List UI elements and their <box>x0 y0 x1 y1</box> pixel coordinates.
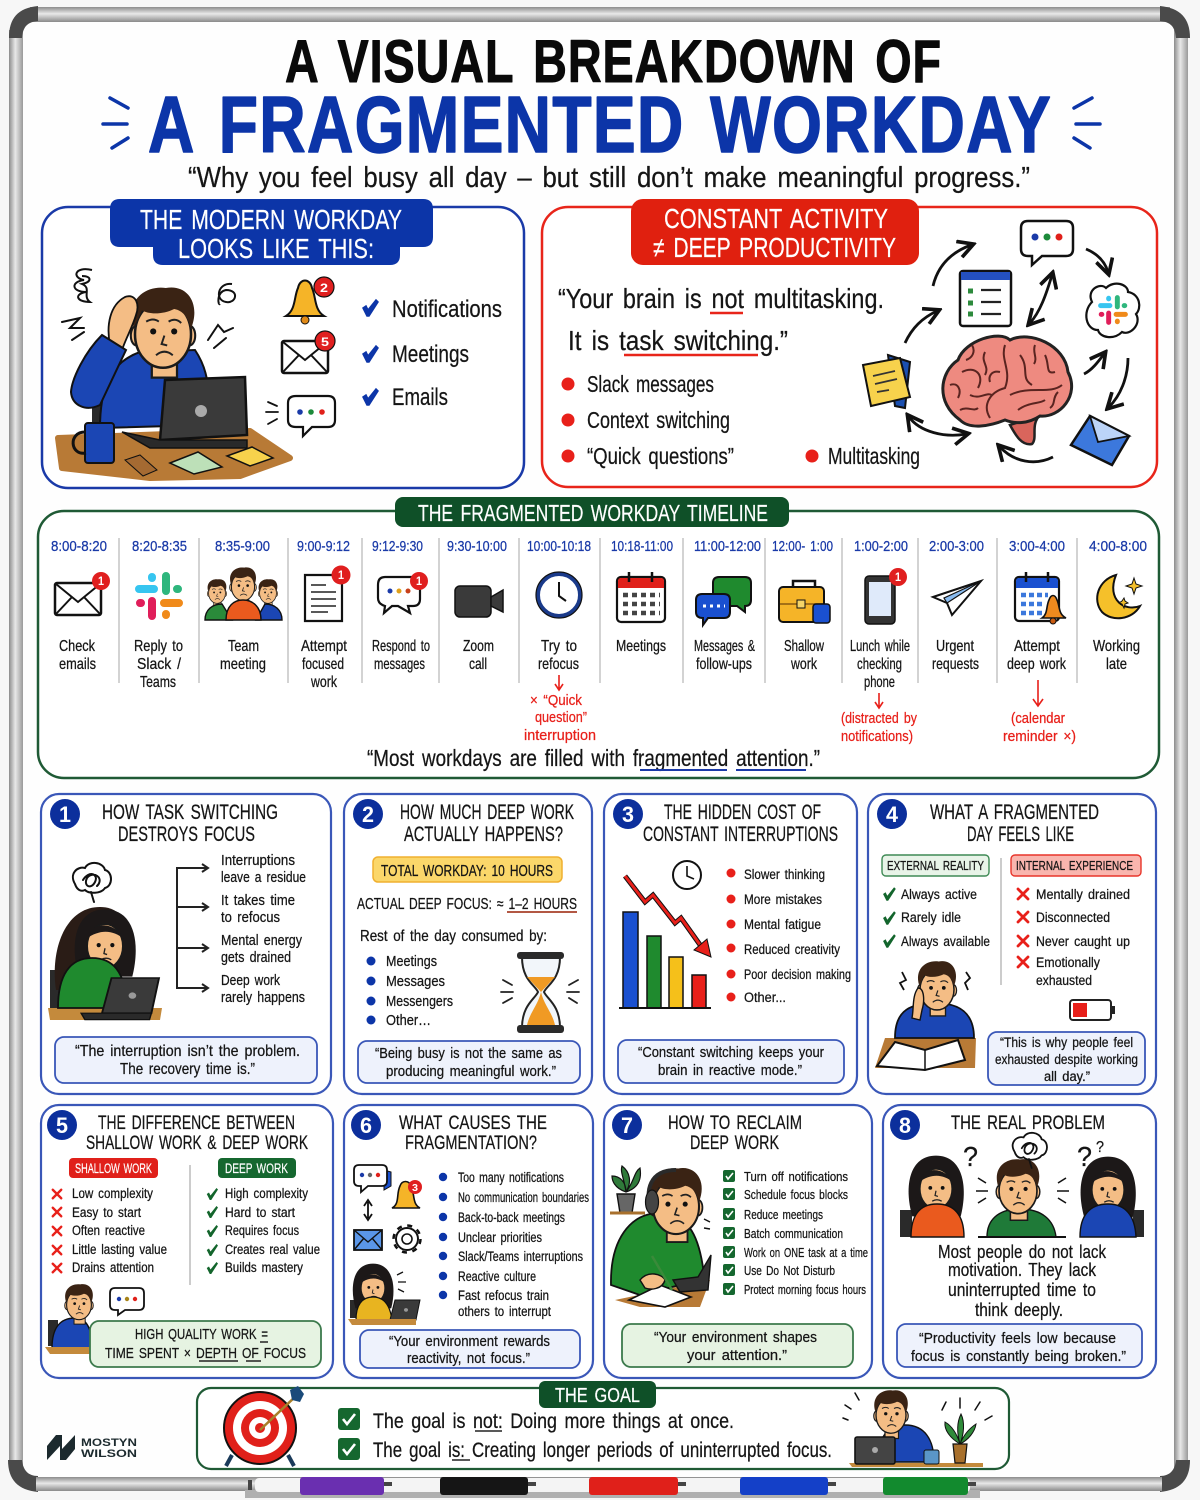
tag: shallow work: SHALLOW WORK <box>75 1161 152 1176</box>
illustration: three confused people: ? <box>963 1141 978 1172</box>
shallow list: Drains attention <box>72 1260 154 1275</box>
icon: messages <box>696 577 751 625</box>
activity labels: Working <box>1093 638 1140 655</box>
icon: clock <box>673 861 701 889</box>
external list: Rarely idle <box>901 910 961 925</box>
tag: internal experience: INTERNAL EXPERIENCE <box>1016 858 1133 873</box>
activity labels: Shallow <box>784 638 824 655</box>
activity labels: work <box>310 674 338 691</box>
causes list: No communication boundaries <box>458 1190 589 1205</box>
illustration: tired man with book <box>875 961 976 1070</box>
formula box <box>90 1321 321 1367</box>
tag: external reality <box>882 855 989 876</box>
chart: falling bars <box>619 876 711 1008</box>
activity labels: messages <box>374 656 425 673</box>
icon: camera <box>455 586 503 617</box>
activity labels: Respond to <box>372 638 430 655</box>
icon: slack <box>139 576 179 616</box>
heading: DESTROYS FOCUS <box>118 823 255 846</box>
activity labels: checking <box>857 656 902 673</box>
number badge: 8 <box>899 1113 911 1138</box>
time labels <box>51 539 1147 555</box>
number badge: 5 <box>56 1113 68 1138</box>
illustration: woman at laptop <box>48 863 162 1020</box>
quote box <box>622 1324 853 1367</box>
heading <box>399 1113 547 1154</box>
illustration: brain with surrounding tools <box>863 221 1139 465</box>
quote box: “Productivity feels low because <box>919 1330 1116 1347</box>
bullet list: Context switching <box>587 407 730 433</box>
external list: Always available <box>901 934 990 949</box>
quote box <box>618 1040 844 1083</box>
text block: think deeply. <box>975 1300 1063 1320</box>
heading: constant activity <box>631 199 919 265</box>
text block: motivation. They lack <box>948 1260 1097 1280</box>
icon: envelope <box>1071 416 1129 465</box>
deep list <box>207 1186 320 1275</box>
quote box: “The interruption isn’t the problem. <box>75 1043 300 1060</box>
card 5: shallow vs deep <box>41 1105 333 1378</box>
icon: envelope with badge <box>282 331 335 373</box>
internal list: Mentally drained <box>1036 887 1130 902</box>
time labels: 8:00-8:20 <box>51 539 107 555</box>
quote box: “Being busy is not the same as <box>375 1045 562 1062</box>
activity labels: phone <box>864 674 895 691</box>
callouts: red interruptions: notifications) <box>841 728 913 745</box>
quote: task switching <box>558 283 884 356</box>
goal statements: The goal is not: Doing more things at once. <box>373 1410 734 1433</box>
goal statements: The goal is: Creating longer periods of uninterrupted focus. <box>373 1439 832 1462</box>
illustration: three confused people: ? <box>1096 1139 1104 1156</box>
title <box>103 28 1100 169</box>
activity labels: follow-ups <box>696 656 752 673</box>
bullet list: “Quick questions” <box>587 443 734 469</box>
heading: THE HIDDEN COST OF <box>664 801 821 824</box>
illustration: woman at laptop <box>348 1264 420 1325</box>
deep list: Builds mastery <box>225 1260 303 1275</box>
icon: clock <box>536 572 582 618</box>
checklist: Work on ONE task at a time <box>744 1245 868 1260</box>
heading: modern workday: THE MODERN WORKDAY <box>140 204 402 235</box>
activity labels: requests <box>932 656 979 673</box>
bullet list <box>726 867 851 1005</box>
quote box: “Your environment rewards <box>389 1333 550 1350</box>
icon: bell: 3 <box>412 1183 418 1194</box>
icon: document: 1 <box>338 568 344 582</box>
panel: timeline <box>38 497 1159 778</box>
shallow list <box>53 1186 167 1275</box>
internal list: Never caught up <box>1036 934 1130 949</box>
checklist: Protect morning focus hours <box>744 1282 866 1297</box>
marker tray with markers <box>245 1477 980 1498</box>
icon: chat <box>354 1165 391 1192</box>
deep list: Hard to start <box>225 1205 295 1220</box>
icon: chat <box>378 572 428 613</box>
icon: calendar with bell <box>1015 572 1066 624</box>
illustration: man at laptop <box>45 1284 93 1354</box>
consequences list: leave a residue <box>221 869 306 886</box>
heading <box>643 801 838 846</box>
checklist <box>363 296 502 411</box>
number badge <box>50 799 80 829</box>
activity labels: refocus <box>538 656 579 673</box>
heading <box>930 801 1099 846</box>
heading: DEEP WORK <box>690 1133 779 1154</box>
illustration: man with laptop and plant <box>843 1390 992 1467</box>
card 3: interruptions cost <box>604 794 857 1094</box>
activity labels: Reply to <box>134 638 183 655</box>
consequences list: It takes time <box>221 892 295 909</box>
quote: task switching: “Your brain is not multitasking. <box>558 283 884 314</box>
callouts: red interruptions: × “Quick <box>530 692 582 709</box>
consequences list: gets drained <box>221 949 291 966</box>
heading: THE REAL PROBLEM <box>951 1113 1105 1134</box>
quote box: reactivity, not focus.” <box>407 1350 530 1367</box>
checklist: Use Do Not Disturb <box>744 1263 835 1278</box>
heading: DAY FEELS LIKE <box>967 823 1074 846</box>
bullet list: Reduced creativity <box>744 942 840 957</box>
time labels: 1:00-2:00 <box>854 539 908 555</box>
deep list: Requires focus <box>225 1223 299 1238</box>
internal list: Emotionally <box>1036 955 1100 970</box>
consequences list: rarely happens <box>221 989 305 1006</box>
activity labels: deep work <box>1007 656 1067 673</box>
icon: chat bubble <box>1021 221 1073 265</box>
activity labels: Messages & <box>694 638 755 655</box>
heading: ACTUALLY HAPPENS? <box>404 823 563 846</box>
icon: briefcase <box>779 581 830 623</box>
heading: WHAT A FRAGMENTED <box>930 801 1099 824</box>
quote box: “Your environment shapes <box>654 1329 817 1346</box>
causes list: Fast refocus train <box>458 1288 549 1303</box>
title: A VISUAL BREAKDOWN OF <box>285 28 942 95</box>
callouts: red interruptions <box>524 675 1076 745</box>
callouts: red interruptions: question” <box>535 709 587 726</box>
consequences list: to refocus <box>221 909 280 926</box>
bullet list: Other… <box>386 1012 431 1029</box>
icon: slack cloud <box>1086 284 1139 337</box>
activity labels: Slack / <box>137 656 181 673</box>
callouts: red interruptions: reminder ×) <box>1003 728 1076 745</box>
icon: chat: 1 <box>416 574 422 588</box>
time labels: 2:00-3:00 <box>929 539 984 555</box>
quote box: “Constant switching keeps your <box>638 1044 824 1061</box>
bullet list: Other... <box>744 990 786 1005</box>
activity labels: Check <box>59 638 96 655</box>
illustration: three confused people <box>900 1133 1144 1237</box>
heading <box>668 1113 802 1154</box>
icon: phone: 1 <box>895 570 901 584</box>
internal list: exhausted <box>1036 973 1092 988</box>
bullet list: Messages <box>386 973 445 990</box>
formula box: TIME SPENT × DEPTH OF FOCUS <box>105 1345 306 1362</box>
activity labels: Team <box>228 638 259 655</box>
number badge: 4 <box>886 802 899 827</box>
card 1: task switching <box>41 794 331 1094</box>
tag: internal experience <box>1011 855 1141 876</box>
time labels: 9:12-9:30 <box>372 539 423 555</box>
icon: chat <box>110 1288 144 1315</box>
time labels: 3:00-4:00 <box>1009 539 1065 555</box>
panel: constant activity <box>542 199 1157 487</box>
subtitle: “Why you feel busy all day – but still don’t make meaningful progress.” <box>188 162 1030 194</box>
bullet list: Multitasking <box>828 443 920 469</box>
number badge <box>47 1110 77 1140</box>
bracket arrows <box>177 868 208 988</box>
heading <box>400 801 574 846</box>
checklist: Meetings <box>392 341 469 368</box>
total workday tag <box>373 857 562 882</box>
quote: fragmented attention: “Most workdays are filled with fragmented attention.” <box>367 745 820 771</box>
number badge <box>877 799 907 829</box>
tag: shallow work <box>69 1158 158 1178</box>
activity labels: Teams <box>140 674 176 691</box>
card 6: causes <box>344 1105 593 1378</box>
activity labels: Lunch while <box>850 638 910 655</box>
quote box: The recovery time is.” <box>120 1061 255 1078</box>
heading: FRAGMENTATION? <box>405 1133 537 1154</box>
icon: moon <box>1097 575 1142 618</box>
text block <box>938 1242 1107 1320</box>
heading: modern workday: LOOKS LIKE THIS: <box>178 233 374 264</box>
illustration: focused man with headphones <box>610 1166 711 1307</box>
rest of day label: Rest of the day consumed by: <box>360 928 547 945</box>
heading: CONSTANT INTERRUPTIONS <box>643 823 838 846</box>
illustration: three confused people: ? <box>1077 1141 1092 1172</box>
checklist: Batch communication <box>744 1226 843 1241</box>
panel: the goal <box>197 1381 1009 1469</box>
consequences list: Mental energy <box>221 932 302 949</box>
number badge <box>890 1110 920 1140</box>
quote box <box>988 1032 1145 1085</box>
time labels: 9:00-9:12 <box>297 539 350 555</box>
quote box: producing meaningful work.” <box>386 1063 556 1080</box>
activity labels: Urgent <box>936 638 974 655</box>
checklist: Schedule focus blocks <box>744 1187 848 1202</box>
heading: HOW TO RECLAIM <box>668 1113 802 1134</box>
number badge: 6 <box>360 1113 372 1138</box>
heading: THE DIFFERENCE BETWEEN <box>98 1113 295 1134</box>
internal list: Disconnected <box>1036 910 1110 925</box>
icon: phone <box>865 568 907 624</box>
icon: hourglass <box>501 952 579 1033</box>
heading: timeline: THE FRAGMENTED WORKDAY TIMELINE <box>418 500 768 526</box>
shallow list: Little lasting value <box>72 1242 167 1257</box>
consequences list: Deep work <box>221 972 280 989</box>
icon: sticky note <box>863 355 910 408</box>
heading: constant activity: CONSTANT ACTIVITY <box>664 203 888 234</box>
panel: modern workday <box>42 199 524 488</box>
logo: Mostyn Wilson <box>47 1435 137 1460</box>
icon: email <box>55 572 110 615</box>
formula box: HIGH QUALITY WORK = <box>135 1326 268 1343</box>
icon: target <box>224 1386 304 1466</box>
activity labels: Try to <box>541 638 577 655</box>
number badge <box>612 1110 642 1140</box>
bullet list <box>562 371 920 469</box>
shallow list: Often reactive <box>72 1223 145 1238</box>
illustration: stressed man at laptop <box>58 269 290 478</box>
bullet list <box>366 953 453 1029</box>
icon: paper plane <box>933 581 981 615</box>
heading: HOW TASK SWITCHING <box>102 801 278 824</box>
bullet list: Mental fatigue <box>744 917 821 932</box>
time labels: 10:18-11:00 <box>611 539 673 555</box>
quote box: brain in reactive mode.” <box>658 1062 802 1079</box>
bullet list: Slower thinking <box>744 867 825 882</box>
shallow list: Easy to start <box>72 1205 141 1220</box>
time labels: 8:20-8:35 <box>132 539 187 555</box>
icon: bell <box>392 1180 422 1208</box>
activity labels: late <box>1106 656 1127 673</box>
external list <box>883 887 990 949</box>
activity labels: work <box>790 656 818 673</box>
deep list: Creates real value <box>225 1242 320 1257</box>
arrow heads <box>202 864 208 992</box>
heading: the goal <box>539 1381 656 1408</box>
heading: SHALLOW WORK & DEEP WORK <box>86 1133 308 1154</box>
callouts: red interruptions: interruption <box>524 727 596 744</box>
number badge <box>353 799 383 829</box>
icon: gear <box>394 1226 420 1252</box>
quote box <box>358 1041 580 1083</box>
number badge: 2 <box>362 802 374 827</box>
causes list: Unclear priorities <box>458 1230 542 1245</box>
goal statements <box>338 1408 832 1462</box>
activity labels: Meetings <box>616 638 666 655</box>
icon: chat bubble <box>266 396 335 436</box>
activity labels: Attempt <box>301 638 347 655</box>
callouts: red interruptions: (calendar <box>1011 710 1065 727</box>
number badge: 7 <box>621 1113 633 1138</box>
quote box: exhausted despite working <box>995 1052 1138 1067</box>
internal list <box>1018 887 1130 988</box>
time labels: 9:30-10:00 <box>447 539 507 555</box>
shallow list: Low complexity <box>72 1186 153 1201</box>
time labels: 12:00- 1:00 <box>772 539 833 555</box>
heading <box>102 801 278 846</box>
logo: Mostyn Wilson: MOSTYN <box>81 1437 137 1449</box>
card 2: deep work <box>344 794 592 1094</box>
bullet list: Poor decision making <box>744 967 851 982</box>
icon: bell with badge <box>286 277 334 324</box>
heading: modern workday <box>110 199 433 265</box>
card 4: what it feels like <box>868 794 1156 1094</box>
text block: uninterrupted time to <box>948 1280 1096 1300</box>
activity labels: meeting <box>220 656 266 673</box>
heading: HOW MUCH DEEP WORK <box>400 801 574 824</box>
tag: deep work: DEEP WORK <box>225 1161 288 1176</box>
arrow <box>364 1200 372 1220</box>
card 8: real problem <box>883 1105 1156 1378</box>
time labels: 8:35-9:00 <box>215 539 270 555</box>
icon: calendar <box>617 572 665 622</box>
causes list: Back-to-back meetings <box>458 1210 565 1225</box>
tag: deep work <box>218 1158 296 1178</box>
heading: constant activity: ≠ DEEP PRODUCTIVITY <box>653 232 896 263</box>
time labels: 4:00-8:00 <box>1089 539 1147 555</box>
card 7: reclaim deep work <box>604 1105 872 1378</box>
tag: external reality: EXTERNAL REALITY <box>887 858 984 873</box>
quote box: all day.” <box>1044 1069 1090 1084</box>
quote box: your attention.” <box>687 1347 787 1364</box>
checklist <box>723 1169 868 1297</box>
arrows <box>905 245 1128 462</box>
bullet list: Meetings <box>386 953 437 970</box>
number badge <box>351 1110 381 1140</box>
checklist: Emails <box>392 384 448 411</box>
logo: Mostyn Wilson: WILSON <box>81 1448 137 1460</box>
activity labels: Zoom <box>463 638 494 655</box>
activity labels <box>59 638 1140 691</box>
causes list: Too many notifications <box>458 1170 564 1185</box>
consequences list: Interruptions <box>221 852 295 869</box>
icon: email: 1 <box>98 574 104 588</box>
icon: low battery <box>1070 1000 1115 1020</box>
quote box <box>360 1330 580 1368</box>
activity labels: call <box>469 656 487 673</box>
heading: timeline <box>395 497 789 527</box>
quote box: “This is why people feel <box>1000 1035 1133 1050</box>
icon: bell with badge: 2 <box>320 281 328 295</box>
icon: brain <box>943 336 1072 444</box>
external list: Always active <box>901 887 977 902</box>
number badge: 1 <box>59 802 71 827</box>
quote box <box>55 1037 317 1083</box>
icon: envelope with badge: 5 <box>321 335 329 349</box>
consequences list <box>221 852 306 1006</box>
icon: team <box>205 567 282 620</box>
heading: the goal: THE GOAL <box>555 1385 640 1407</box>
callouts: red interruptions: (distracted by <box>841 710 917 727</box>
number badge: 3 <box>622 802 634 827</box>
causes list: Slack/Teams interruptions <box>458 1249 583 1264</box>
causes list: others to interrupt <box>458 1304 551 1319</box>
activity labels: Attempt <box>1014 638 1060 655</box>
icon: document <box>305 566 350 621</box>
heading: WHAT CAUSES THE <box>399 1113 547 1134</box>
causes list: Reactive culture <box>458 1269 536 1284</box>
activity labels: focused <box>302 656 344 673</box>
heading <box>86 1113 308 1154</box>
number badge <box>613 799 643 829</box>
icon: envelope <box>354 1230 382 1250</box>
checklist: Notifications <box>392 296 502 323</box>
quote box: focus is constantly being broken.” <box>911 1348 1126 1365</box>
text block: Most people do not lack <box>938 1242 1107 1262</box>
icon: checklist <box>960 271 1011 326</box>
time labels: 11:00-12:00 <box>694 539 761 555</box>
bullet list: More mistakes <box>744 892 822 907</box>
bullet list: Slack messages <box>587 371 714 397</box>
deep list: High complexity <box>225 1186 308 1201</box>
bullet list: Messengers <box>386 993 453 1010</box>
time labels: 10:00-10:18 <box>527 539 591 555</box>
quote: task switching: It is task switching.” <box>568 325 788 356</box>
deep focus line: ACTUAL DEEP FOCUS: ≈ 1–2 HOURS <box>357 896 577 913</box>
causes list <box>439 1170 589 1319</box>
total workday tag: TOTAL WORKDAY: 10 HOURS <box>381 863 553 880</box>
activity labels: emails <box>59 656 96 673</box>
quote box <box>897 1324 1142 1367</box>
checklist: Reduce meetings <box>744 1207 823 1222</box>
checklist: Turn off notifications <box>744 1169 848 1184</box>
